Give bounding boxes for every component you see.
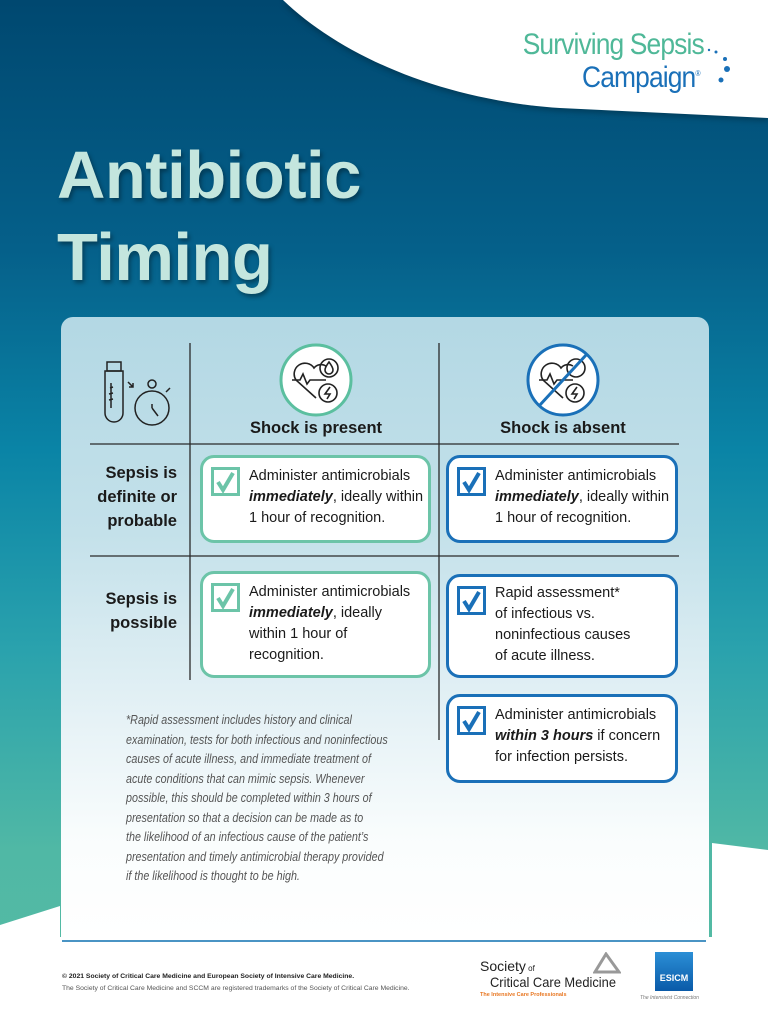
logo: ESICM: ESICM bbox=[660, 973, 688, 983]
footnote: presentation and timely antimicrobial therapy provided bbox=[126, 850, 384, 864]
logo: Surviving Sepsis Campaign: Surviving Sepsis bbox=[523, 28, 704, 61]
title: Timing bbox=[57, 220, 272, 295]
box: present / definite: immediately, ideally within bbox=[249, 489, 423, 505]
footnote: if the likelihood is thought to be high. bbox=[126, 869, 300, 883]
box: present / possible: Administer antimicrobials bbox=[249, 584, 410, 600]
box: absent / within 3 hours: for infection persists. bbox=[495, 749, 628, 765]
copyright text: © 2021 Society of Critical Care Medicine and European Society of Intensive Care Medicine. bbox=[62, 973, 354, 980]
footnote: the likelihood of an infectious cause of the patient’s bbox=[126, 830, 368, 844]
footnote: possible, this should be completed within 3 hours of bbox=[126, 791, 372, 805]
heading: Shock is present: Shock is present bbox=[250, 419, 382, 437]
footer rule bbox=[62, 940, 706, 942]
icon: shock absent bbox=[526, 344, 600, 416]
title: Antibiotic bbox=[57, 138, 361, 213]
box: absent / definite: 1 hour of recognition. bbox=[495, 510, 631, 526]
box: absent / possible rapid assessment: of infectious vs. bbox=[495, 606, 595, 622]
icon: test tube and stopwatch bbox=[104, 361, 170, 426]
footnote: causes of acute illness, and immediate treatment of bbox=[126, 752, 371, 766]
logo: SCCM: Critical Care Medicine bbox=[490, 974, 616, 990]
logo: SCCM: Society of bbox=[480, 958, 535, 974]
box: absent / within 3 hours bbox=[446, 694, 678, 783]
box: absent / within 3 hours: within 3 hours if concern bbox=[495, 728, 660, 744]
box: absent / possible rapid assessment bbox=[446, 574, 678, 678]
footnote: examination, tests for both infectious and noninfectious bbox=[126, 732, 388, 746]
box: present / possible: recognition. bbox=[249, 647, 324, 663]
box: present / possible bbox=[200, 571, 431, 678]
footnote: acute conditions that can mimic sepsis. Whenever bbox=[126, 772, 364, 786]
heading: Shock is absent: Shock is absent bbox=[500, 419, 626, 437]
box: absent / within 3 hours: Administer antimicrobials bbox=[495, 707, 656, 723]
box: absent / possible rapid assessment: noninfectious causes bbox=[495, 627, 630, 643]
box: absent / possible rapid assessment: of acute illness. bbox=[495, 648, 595, 664]
white swoosh top right bbox=[283, 0, 768, 122]
box: absent / definite bbox=[446, 455, 678, 543]
footnote: *Rapid assessment includes history and clinical bbox=[126, 713, 352, 727]
row label: definite or probable: definite or bbox=[97, 488, 177, 506]
row label: possible: possible bbox=[110, 614, 177, 632]
panel: table bbox=[61, 317, 709, 937]
row label: possible: Sepsis is bbox=[105, 590, 177, 608]
box: absent / definite: immediately, ideally within bbox=[495, 489, 669, 505]
footnote bbox=[126, 713, 388, 883]
logo: SCCM bbox=[480, 952, 621, 998]
box: present / definite bbox=[200, 455, 431, 543]
logo: Surviving Sepsis Campaign: Campaign® bbox=[582, 61, 700, 94]
copyright text: The Society of Critical Care Medicine and SCCM are registered trademarks of the Society of Critical Care Medicine. bbox=[62, 985, 410, 992]
logo: ESICM: The Intensivist Connection bbox=[640, 995, 699, 1001]
box: absent / possible rapid assessment: Rapid assessment* bbox=[495, 585, 620, 601]
logo: SCCM: The Intensive Care Professionals bbox=[480, 992, 567, 998]
box: present / definite: Administer antimicrobials bbox=[249, 468, 410, 484]
icon: shock present bbox=[280, 344, 352, 416]
box: present / possible: immediately, ideally bbox=[249, 605, 382, 621]
row label: definite or probable bbox=[97, 464, 177, 530]
title bbox=[57, 138, 362, 299]
logo: ESICM bbox=[640, 952, 699, 1001]
box: present / possible: within 1 hour of bbox=[249, 626, 347, 642]
copyright text bbox=[62, 973, 410, 992]
box: absent / definite: Administer antimicrobials bbox=[495, 468, 656, 484]
box: present / definite: 1 hour of recognition. bbox=[249, 510, 385, 526]
row label: definite or probable: Sepsis is bbox=[105, 464, 177, 482]
row label: possible bbox=[105, 590, 177, 632]
row label: definite or probable: probable bbox=[107, 512, 177, 530]
footnote: presentation so that a decision can be made as to bbox=[126, 810, 363, 824]
logo: Surviving Sepsis Campaign bbox=[523, 28, 730, 94]
